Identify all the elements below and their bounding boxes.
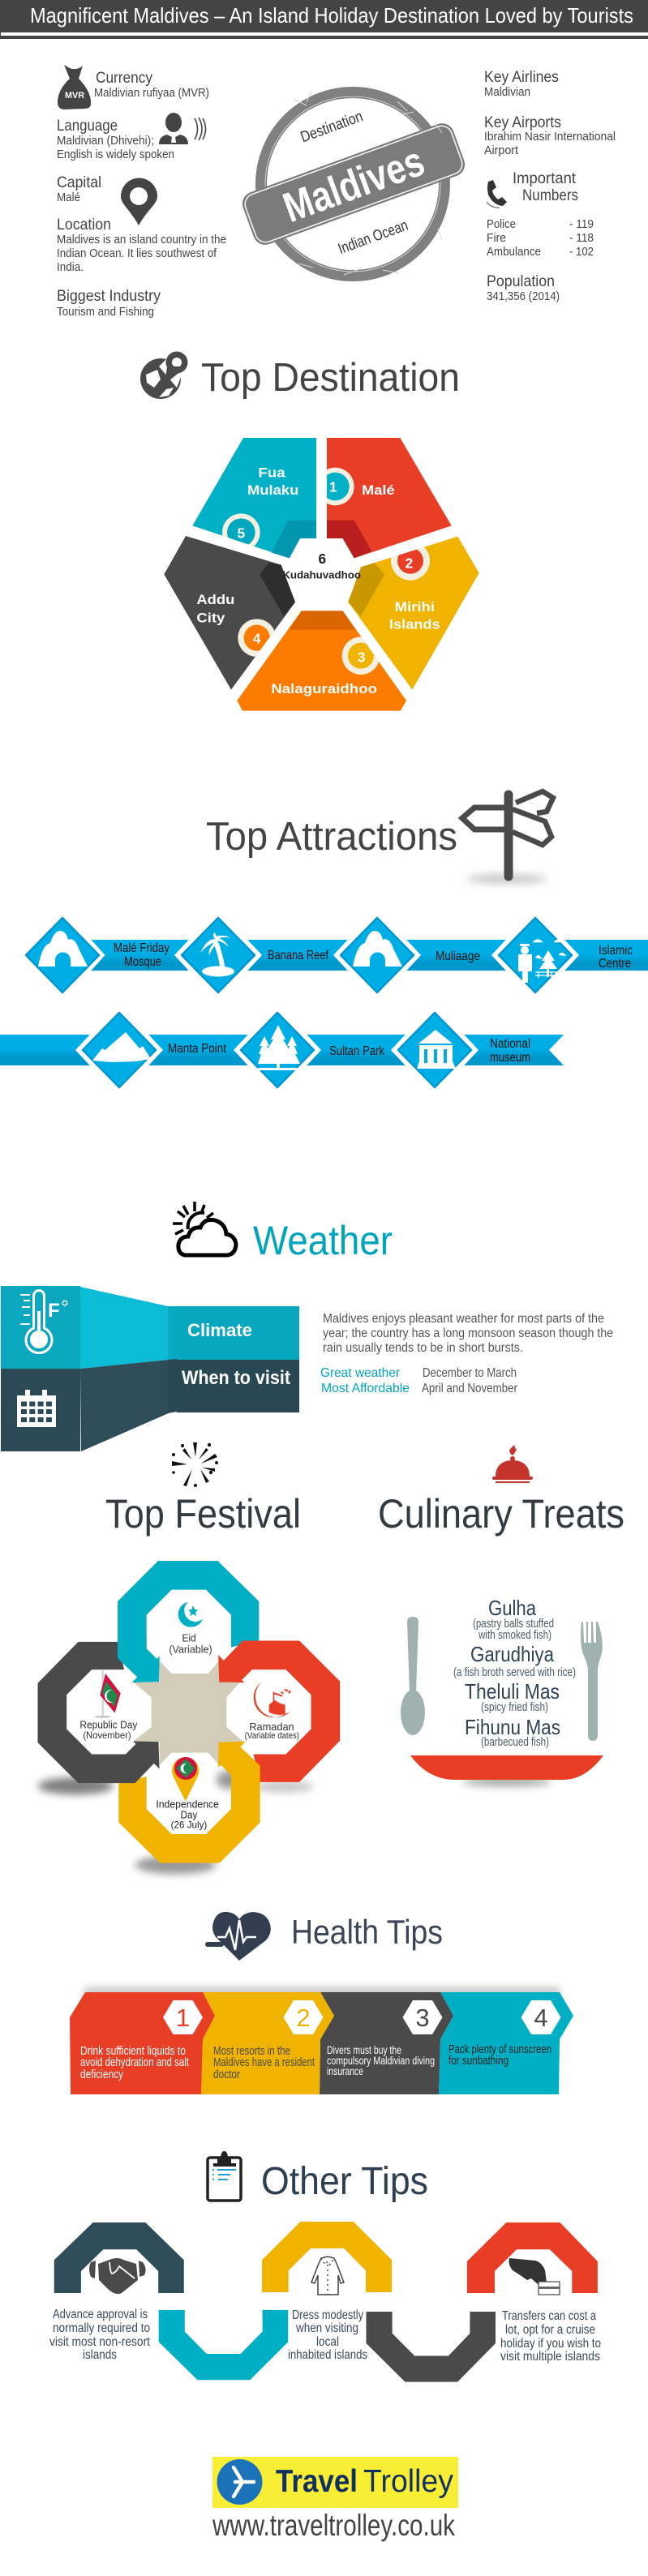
emergency numbers: - 118 <box>569 232 594 245</box>
text: weather description: rain usually tends to be in short bursts. <box>323 1341 523 1355</box>
segment: Nalaguraidhoo: Nalaguraidhoo <box>271 681 377 697</box>
emergency numbers: - 102 <box>569 246 594 259</box>
stamp: Maldives: Indian Ocean <box>336 217 410 258</box>
tip 4: 4 <box>534 2004 548 2032</box>
text: weather description <box>323 1312 613 1355</box>
text: best time table <box>320 1366 518 1395</box>
text: transfers tip: visit multiple islands <box>500 2350 600 2364</box>
tip 2: Maldives have a resident <box>213 2056 315 2069</box>
segment: Mirihi Islands: Islands <box>389 616 440 632</box>
text: dress modestly tip: inhabited islands <box>288 2348 367 2362</box>
location: Indian Ocean. It lies southwest of <box>57 247 217 260</box>
dish: Gulha: with smoked fish) <box>478 1629 551 1642</box>
ring: Independence Day <box>118 1742 260 1863</box>
attraction: Banana Reef: Banana Reef <box>268 949 329 962</box>
text: weather description: year; the country has a long monsoon season though the <box>323 1327 613 1340</box>
biggest industry <box>57 288 161 319</box>
segment: Malé <box>316 438 452 558</box>
panel: key facts left <box>57 65 226 319</box>
location: Location <box>57 216 111 234</box>
key airports: Key Airports <box>484 114 561 131</box>
emergency numbers <box>487 218 594 259</box>
key airports: Ibrahim Nasir International <box>484 131 616 144</box>
text: transfers tip <box>500 2309 601 2364</box>
icon: sun and cloud <box>173 1202 236 1255</box>
text: dress modestly tip: Dress modestly <box>292 2308 363 2322</box>
centre: Kudahuvadhoo <box>282 551 361 581</box>
segment: Addu City: Addu <box>196 592 234 607</box>
tip 3: Divers must buy the <box>327 2044 401 2056</box>
icon: signpost <box>462 791 553 884</box>
currency: Currency <box>96 70 152 87</box>
website url: www.traveltrolley.co.uk <box>212 2509 455 2542</box>
tip 3: 3 <box>415 2004 430 2032</box>
climate block <box>177 1306 299 1360</box>
language: Maldivian (Dhivehi); <box>57 135 154 148</box>
attraction: National museum <box>398 1013 530 1087</box>
panel: key facts right <box>484 69 616 303</box>
segment: Fua Mulaku: Mulaku <box>247 482 298 498</box>
text: best time table: April and November <box>422 1382 518 1395</box>
tip 1 <box>70 1992 215 2094</box>
segment: Fua Mulaku: Fua <box>258 465 285 480</box>
text: advance approval tip: normally required to <box>53 2321 150 2335</box>
segment: Addu City <box>164 536 295 690</box>
heading: top attractions <box>206 791 553 884</box>
heading: top destination: Top Destination <box>201 356 460 400</box>
segment: Mirihi Islands: 2 <box>406 555 413 572</box>
heading: other tips: Other Tips <box>261 2160 428 2203</box>
location: Maldives is an island country in the <box>57 234 226 246</box>
dish: Gulha: Gulha <box>488 1596 536 1620</box>
attraction: Islamic Centre: Islamic <box>599 944 633 958</box>
icon: thermometer <box>20 1291 67 1353</box>
heading: health tips: Health Tips <box>291 1913 443 1951</box>
emergency numbers: Police <box>487 218 516 231</box>
panel: climate and when to visit blocks <box>1 1286 299 1451</box>
emergency numbers: Fire <box>487 232 506 245</box>
chart: other tips serpentine path <box>54 2222 598 2382</box>
tip 2: doctor <box>213 2068 240 2081</box>
segment: Mirihi Islands <box>348 537 479 690</box>
capital <box>57 174 101 204</box>
icon: heart with pulse <box>208 1912 271 1961</box>
attraction: Muliaage <box>341 918 480 992</box>
icon: map pin <box>121 178 157 225</box>
heading: weather <box>173 1202 393 1263</box>
attraction: Sultan Park: Sultan Park <box>329 1044 384 1058</box>
content: Republic Day: (November) <box>83 1730 131 1741</box>
ring: Eid <box>118 1561 259 1682</box>
tip 3: compulsory Maldivian diving <box>327 2055 435 2067</box>
content: Independence Day: Day <box>181 1810 198 1821</box>
icon: thermometer: F <box>48 1300 60 1322</box>
tip 2: Most resorts in the <box>213 2045 290 2058</box>
segment: Mirihi Islands: Mirihi <box>395 599 435 615</box>
content: Independence Day: (26 July) <box>171 1820 207 1831</box>
heading: weather: Weather <box>253 1218 393 1263</box>
icon: calendar <box>17 1390 56 1427</box>
content: Eid: Eid <box>182 1631 196 1644</box>
heading: health tips <box>208 1912 443 1961</box>
tip 1: 1 <box>176 2004 190 2032</box>
attraction: Banana Reef <box>182 918 329 992</box>
stamp: Maldives: Destination <box>298 108 365 146</box>
important numbers heading <box>513 170 578 204</box>
dish: Fihunu Mas: Fihunu Mas <box>465 1715 560 1739</box>
dish: Theluli Mas: Theluli Mas <box>465 1679 560 1704</box>
segment: Nalaguraidhoo <box>237 611 406 711</box>
text: dress modestly tip <box>288 2308 367 2362</box>
text: advance approval tip: islands <box>83 2348 117 2362</box>
tip 1: avoid dehydration and salt <box>80 2056 189 2069</box>
content: Ramadan <box>245 1682 299 1741</box>
icon: money bag <box>58 65 91 109</box>
icon: plate <box>410 1755 603 1786</box>
icon: spoon <box>401 1617 425 1735</box>
emergency numbers: Ambulance <box>487 246 541 259</box>
ring: Republic Day <box>37 1642 159 1783</box>
segment: Malé: 1 <box>329 479 337 495</box>
content: Independence Day <box>156 1757 219 1831</box>
logo: Travel Trolley: Trolley <box>363 2464 453 2499</box>
icon: speaking person <box>159 113 206 144</box>
attraction: Malé Friday Mosque <box>26 918 170 992</box>
centre: Kudahuvadhoo: 6 <box>319 551 327 567</box>
dish: Fihunu Mas <box>465 1715 560 1749</box>
tip 4 <box>439 1992 573 2094</box>
segment: Addu City: 4 <box>253 630 261 646</box>
attraction: Manta Point <box>83 1013 227 1087</box>
header banner <box>0 0 648 39</box>
dish: Theluli Mas <box>465 1679 560 1714</box>
dish: Fihunu Mas: (barbecued fish) <box>481 1736 549 1749</box>
content: Ramadan: (Variable dates) <box>245 1731 299 1741</box>
climate block: Climate <box>187 1320 252 1340</box>
text: dress modestly tip: local <box>316 2335 339 2349</box>
segment: Nalaguraidhoo: 3 <box>358 649 366 666</box>
icon: handshake <box>89 2258 146 2294</box>
dish: Gulha <box>473 1596 554 1642</box>
arch: transfers <box>467 2222 598 2293</box>
text: advance approval tip <box>49 2308 151 2362</box>
population: Population <box>487 273 555 290</box>
when to visit block <box>177 1360 299 1412</box>
text: advance approval tip: Advance approval is <box>53 2308 148 2321</box>
tip 1: Drink sufficient liquids to <box>80 2045 186 2058</box>
content: Ramadan: Ramadan <box>249 1721 294 1733</box>
key airlines: Maldivian <box>484 86 530 99</box>
arrow: Eid ring head <box>118 1638 160 1682</box>
stamp: Maldives <box>239 91 468 276</box>
icon: firework <box>172 1442 218 1487</box>
key airlines: Key Airlines <box>484 69 559 86</box>
panel: health tips chevrons <box>70 1988 573 2094</box>
population <box>487 273 560 303</box>
icon: hand with card <box>509 2258 560 2295</box>
arch: approval <box>54 2222 184 2293</box>
when to visit block: When to visit <box>182 1367 290 1389</box>
attraction: National museum: museum <box>490 1051 530 1065</box>
icon: fork <box>581 1622 603 1741</box>
icon: shirt <box>311 2257 344 2295</box>
heading: top attractions: Top Attractions <box>206 815 457 859</box>
icon: clipboard <box>208 2151 241 2201</box>
chart: festival octagon rings <box>37 1561 340 1874</box>
content: Independence Day: Independence <box>156 1799 219 1811</box>
attraction: Islamic Centre <box>499 918 633 992</box>
location: India. <box>57 261 84 274</box>
icon: telephone <box>487 180 507 208</box>
stamp: Maldives: Maldives <box>277 138 431 232</box>
tip 2 <box>201 1992 334 2094</box>
link: teal U <box>159 2310 288 2380</box>
currency: Maldivian rufiyaa (MVR) <box>94 87 209 100</box>
dish: Gulha: (pastry balls stuffed <box>473 1618 554 1631</box>
attraction: Islamic Centre: Centre <box>599 957 631 971</box>
heading: top destination <box>140 349 460 400</box>
important numbers heading: Numbers <box>522 187 578 204</box>
biggest industry: Tourism and Fishing <box>57 306 154 319</box>
segment: Malé: Malé <box>362 482 395 498</box>
icon: globe and pin <box>140 349 188 399</box>
heading: top festival: Top Festival <box>105 1491 301 1537</box>
dish: Theluli Mas: (spicy fried fish) <box>481 1701 548 1714</box>
icon: food cloche <box>492 1445 533 1483</box>
content: Eid <box>169 1602 212 1656</box>
biggest industry: Biggest Industry <box>57 288 161 305</box>
attraction: Muliaage: Muliaage <box>436 949 480 963</box>
emergency numbers: - 119 <box>569 218 594 231</box>
tip 2: 2 <box>296 2004 311 2032</box>
text: transfers tip: holiday if you wish to <box>500 2337 601 2351</box>
arch: dress <box>262 2222 392 2292</box>
link: dark U <box>367 2312 496 2382</box>
text: advance approval tip: visit most non-resort <box>49 2335 151 2349</box>
panel: culinary treats list <box>401 1596 603 1786</box>
location <box>57 216 226 274</box>
segment: Addu City: City <box>196 610 225 625</box>
ribbon: attractions row 1 <box>21 908 648 1002</box>
text: best time table: December to March <box>423 1366 517 1380</box>
important numbers heading: Important <box>513 170 577 187</box>
text: best time table: Great weather <box>320 1366 401 1380</box>
language: English is widely spoken <box>57 148 174 161</box>
segment: Fua Mulaku: 5 <box>238 525 246 541</box>
key airports <box>484 114 616 157</box>
tip 1: deficiency <box>80 2068 124 2081</box>
language <box>57 118 174 161</box>
key airports: Airport <box>484 144 518 157</box>
population: 341,356 (2014) <box>487 290 560 303</box>
currency <box>94 70 209 100</box>
tip 3: insurance <box>327 2065 363 2077</box>
tip 4: for sunbathing <box>448 2055 509 2068</box>
content: Republic Day <box>79 1670 138 1741</box>
language: Language <box>57 118 118 135</box>
content: Republic Day: Republic Day <box>79 1720 138 1731</box>
content: Eid: (Variable) <box>169 1644 212 1656</box>
dish: Garudhiya <box>453 1642 576 1679</box>
dish: Garudhiya: Garudhiya <box>470 1642 554 1666</box>
attraction: Malé Friday Mosque: Mosque <box>124 955 161 969</box>
ring: Ramadan <box>218 1640 340 1782</box>
attraction: Malé Friday Mosque: Malé Friday <box>114 941 170 955</box>
tip 4: Pack plenty of sunscreen <box>448 2043 551 2056</box>
capital: Capital <box>57 174 101 191</box>
attraction: Sultan Park <box>241 1013 384 1087</box>
chart: destination pentagon <box>164 438 479 711</box>
tip 3 <box>320 1992 453 2094</box>
ribbon: attractions row 2 <box>0 1003 564 1097</box>
attraction: National museum: National <box>490 1037 530 1051</box>
icon: money bag: MVR <box>65 91 84 101</box>
heading: other tips <box>208 2151 428 2203</box>
text: transfers tip: lot, opt for a cruise <box>505 2323 595 2337</box>
text: weather description: Maldives enjoys pleasant weather for most parts of the <box>323 1312 604 1326</box>
icon: plane badge <box>217 2459 263 2505</box>
centre: Kudahuvadhoo: Kudahuvadhoo <box>282 569 361 581</box>
attraction: Manta Point: Manta Point <box>168 1042 227 1056</box>
segment: Fua Mulaku <box>192 438 316 558</box>
capital: Malé <box>57 191 80 204</box>
heading: culinary treats: Culinary Treats <box>378 1491 624 1537</box>
text: transfers tip: Transfers can cost a <box>502 2309 596 2323</box>
logo: Travel Trolley <box>212 2457 458 2508</box>
text: best time table: Most Affordable <box>321 1382 410 1395</box>
key airlines <box>484 69 559 99</box>
dish: Garudhiya: (a fish broth served with rice) <box>453 1666 576 1679</box>
text: dress modestly tip: when visiting <box>295 2321 358 2335</box>
logo: Travel Trolley: Travel <box>276 2464 358 2499</box>
